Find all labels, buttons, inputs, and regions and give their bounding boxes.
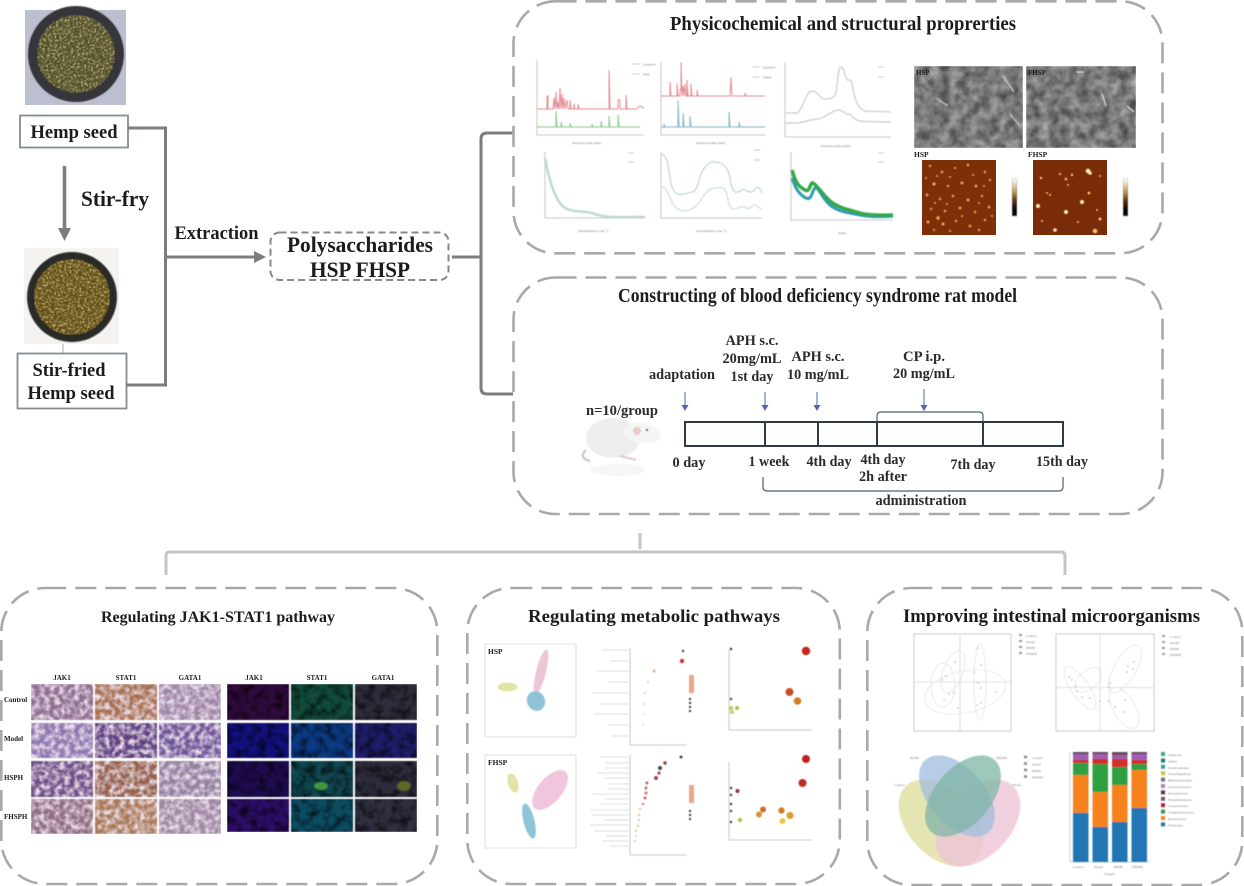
chart: Venn diagram: Control	[894, 783, 905, 787]
arrow: stir-fry	[58, 166, 71, 241]
column labels: GATA1	[179, 674, 202, 682]
labels: timeline days: 15th day	[1036, 454, 1089, 470]
chart: enrichment dots HSP	[592, 648, 694, 745]
chart: HPLC HSP	[537, 60, 656, 145]
photo: stir-fried hemp seed dish	[24, 248, 119, 344]
photo: hemp seed dish	[25, 6, 126, 105]
image: SEM FHSP: FHSP	[1028, 69, 1047, 77]
chart: UV absorption	[545, 152, 645, 233]
label: CP 20 mg/mL	[893, 349, 955, 382]
chart: Venn diagram: HSPH	[910, 756, 919, 760]
chart: PCoA OTU	[1056, 634, 1154, 733]
connector: seeds to extraction	[126, 128, 266, 385]
column labels: JAK1	[53, 674, 71, 682]
label: Extraction: Extraction	[174, 223, 259, 244]
legend: PCA OTU	[1019, 634, 1037, 656]
column labels: STAT1	[116, 674, 137, 682]
legend: stacked bars: Monoflagellates	[1168, 772, 1191, 776]
icon: rat	[583, 418, 662, 476]
chart: FTIR spectra: Wavenumbers (cm⁻¹)	[696, 229, 727, 233]
chart: PCA FHSP	[485, 755, 576, 848]
legend: stacked bars: Bacteroidota	[1168, 817, 1186, 821]
label: Hemp seed	[20, 116, 128, 148]
arrows: injection times	[682, 389, 928, 411]
heading: physicochemical: Physicochemical and structural proprerties	[670, 13, 1016, 35]
bracket: administration	[763, 477, 1063, 491]
chart: XRD: Angle	[838, 231, 847, 235]
chart: Venn diagram: FHSPH	[996, 756, 1007, 760]
micrographs: immunofluorescence	[227, 684, 417, 832]
chart: stacked bars: Model	[1094, 865, 1103, 869]
labels: timeline days	[672, 452, 1089, 485]
chart: PCA OTU	[914, 634, 1011, 731]
label: CP 20 mg/mL: 20 mg/mL	[893, 366, 955, 382]
chart: FTIR spectra	[661, 150, 762, 233]
connector: model to outcome panels	[166, 533, 1065, 575]
legend: PCA OTU: Control	[1026, 634, 1037, 638]
legend: PCoA OTU: FHSPH	[1170, 653, 1181, 657]
chart: HPLC FHSP: FHSP	[763, 76, 771, 80]
row labels: Control	[4, 696, 27, 704]
chart: HPLC FHSP: Standard	[763, 66, 776, 70]
image: SEM HSP: HSP	[916, 69, 930, 77]
image: AFM HSP	[922, 160, 996, 235]
legend: Venn: Model	[1032, 762, 1041, 766]
row labels: HSPH	[4, 774, 24, 782]
labels: timeline days: 7th day	[950, 457, 996, 473]
timeline bar	[685, 422, 1063, 446]
colorbar: AFM HSP	[1012, 179, 1017, 216]
legend: Venn: Control	[1032, 756, 1043, 760]
image: SEM FHSP	[1026, 66, 1136, 148]
chart: PCA HSP	[485, 644, 576, 737]
heading: JAK1-STAT1: Regulating JAK1-STAT1 pathway	[101, 609, 335, 626]
panel: metabolic pathways	[467, 588, 840, 884]
legend: PCA OTU: Model	[1026, 640, 1035, 644]
chart: molecular weight curves	[785, 62, 891, 148]
chart: molecular weight curves: Retention time (min)	[821, 144, 851, 148]
legend: stacked bars: Cyanobacteria	[1168, 804, 1189, 808]
chart: XRD	[791, 152, 893, 235]
label: Stir-fried hemp seed: Hemp seed	[28, 383, 115, 404]
label: APH 20 mg/mL: APH s.c.	[726, 333, 778, 349]
label: adaptation: adaptation	[649, 367, 715, 383]
legend: Venn	[1024, 756, 1043, 780]
labels: timeline days: 4th day	[860, 452, 906, 468]
chart: HPLC FHSP	[661, 62, 776, 145]
panel: intestinal microorganisms	[867, 588, 1242, 885]
label: Stir-fried hemp seed: Stir-fried	[32, 360, 106, 381]
legend: stacked bars: Campylobacterota	[1168, 811, 1194, 815]
legend: Venn: HSPH	[1032, 769, 1041, 773]
panel: physicochemical and structural properties	[514, 1, 1162, 253]
labels: timeline days: 1 week	[748, 454, 790, 470]
label: HSP AFM: HSP	[914, 150, 929, 159]
heading: microorganisms: Improving intestinal microorganisms	[903, 607, 1200, 627]
label: Stir-fried hemp seed	[18, 344, 126, 408]
column labels: STAT1	[307, 674, 328, 682]
chart: HPLC HSP: Standard	[643, 62, 656, 66]
legend: PCoA OTU: Model	[1170, 641, 1179, 645]
heading: rat model: Constructing of blood deficiency syndrome rat model	[618, 286, 1018, 307]
bracket: CP period	[877, 412, 983, 421]
legend: stacked bars: Others	[1168, 760, 1178, 764]
label: FHSP AFM: FHSP	[1028, 150, 1048, 159]
label: administration: administration	[876, 493, 966, 509]
legend: stacked bars: Bifidobacteriales	[1168, 779, 1193, 783]
column labels: GATA1	[372, 674, 395, 682]
label: APH 20 mg/mL	[722, 333, 782, 385]
label: CP 20 mg/mL: CP i.p.	[903, 349, 945, 365]
legend: stacked bars: Desulfobacterota	[1168, 798, 1192, 802]
label: APH 20 mg/mL: 1st day	[730, 369, 774, 385]
legend: PCoA OTU: HSPH	[1170, 647, 1179, 651]
chart: stacked bars	[1070, 752, 1150, 876]
label: Stir-fry: Stir-fry	[81, 186, 149, 211]
legend: stacked bars: Actinobacteriota	[1168, 785, 1192, 789]
legend: PCA OTU: HSPH	[1026, 646, 1035, 650]
box: polysaccharides	[270, 232, 448, 282]
chart: stacked bars: Control	[1073, 865, 1084, 869]
labels: timeline days: 2h after	[859, 469, 908, 485]
label: APH 10 mg/mL	[787, 349, 849, 383]
chart: UV absorption: Wavenumbers (cm⁻¹)	[578, 229, 609, 233]
chart: pathway bubbles HSP	[729, 647, 812, 730]
chart: stacked bars: FHSPH	[1132, 865, 1143, 869]
legend: stacked bars: Firmicutes	[1168, 823, 1184, 827]
chart: Venn diagram: Model	[1012, 783, 1021, 787]
label: group size: n=10/group	[586, 403, 658, 419]
label: APH 10 mg/mL: 10 mg/mL	[787, 367, 849, 383]
row labels: FHSPH	[4, 813, 28, 821]
box: polysaccharides: Polysaccharides	[287, 232, 433, 257]
chart: enrichment dots FHSP	[590, 755, 694, 855]
label: Hemp seed: Hemp seed	[30, 122, 118, 143]
legend: PCoA OTU	[1162, 635, 1181, 657]
column labels	[53, 674, 395, 682]
label: APH 20 mg/mL: 20mg/mL	[722, 351, 782, 367]
labels: timeline days: 4th day	[806, 454, 852, 470]
image: SEM HSP	[914, 66, 1023, 148]
legend: stacked bars	[1161, 752, 1194, 827]
colorbar: AFM FHSP	[1123, 179, 1128, 216]
legend: stacked bars: Unknown	[1168, 753, 1182, 757]
labels: timeline days: 0 day	[672, 455, 706, 471]
row labels	[4, 696, 28, 821]
legend: stacked bars: Proteobacteria	[1168, 791, 1189, 795]
row labels: Model	[4, 735, 23, 743]
image: AFM FHSP	[1033, 160, 1107, 235]
box: polysaccharides: HSP FHSP	[310, 257, 410, 282]
micrographs: immunohistochemistry	[31, 684, 221, 834]
connector: polysaccharides to panels	[452, 133, 513, 394]
label: APH 10 mg/mL: APH s.c.	[792, 349, 844, 365]
chart: PCA HSP: HSP	[488, 647, 503, 656]
panel: JAK1-STAT1 pathway	[1, 588, 437, 884]
heading: metabolic: Regulating metabolic pathways	[528, 606, 780, 626]
legend: PCoA OTU: Control	[1170, 635, 1181, 639]
chart: stacked bars: Sample	[1104, 872, 1115, 876]
chart: PCA FHSP: FHSP	[488, 758, 508, 767]
chart: stacked bars: HSPH	[1114, 865, 1123, 869]
column labels: JAK1	[245, 674, 263, 682]
chart: pathway bubbles FHSP	[729, 755, 812, 840]
chart: Venn diagram	[882, 741, 1037, 883]
legend: Venn: FHSPH	[1032, 776, 1043, 780]
legend: stacked bars: Oscillospirales	[1168, 766, 1189, 770]
legend: PCA OTU: FHSPH	[1026, 652, 1037, 656]
panel: blood deficiency rat model	[514, 278, 1162, 514]
chart: HPLC HSP: HSP	[643, 72, 649, 76]
chart: HPLC FHSP: Retention time (min)	[696, 141, 726, 145]
chart: HPLC HSP: Retention time (min)	[572, 141, 602, 145]
